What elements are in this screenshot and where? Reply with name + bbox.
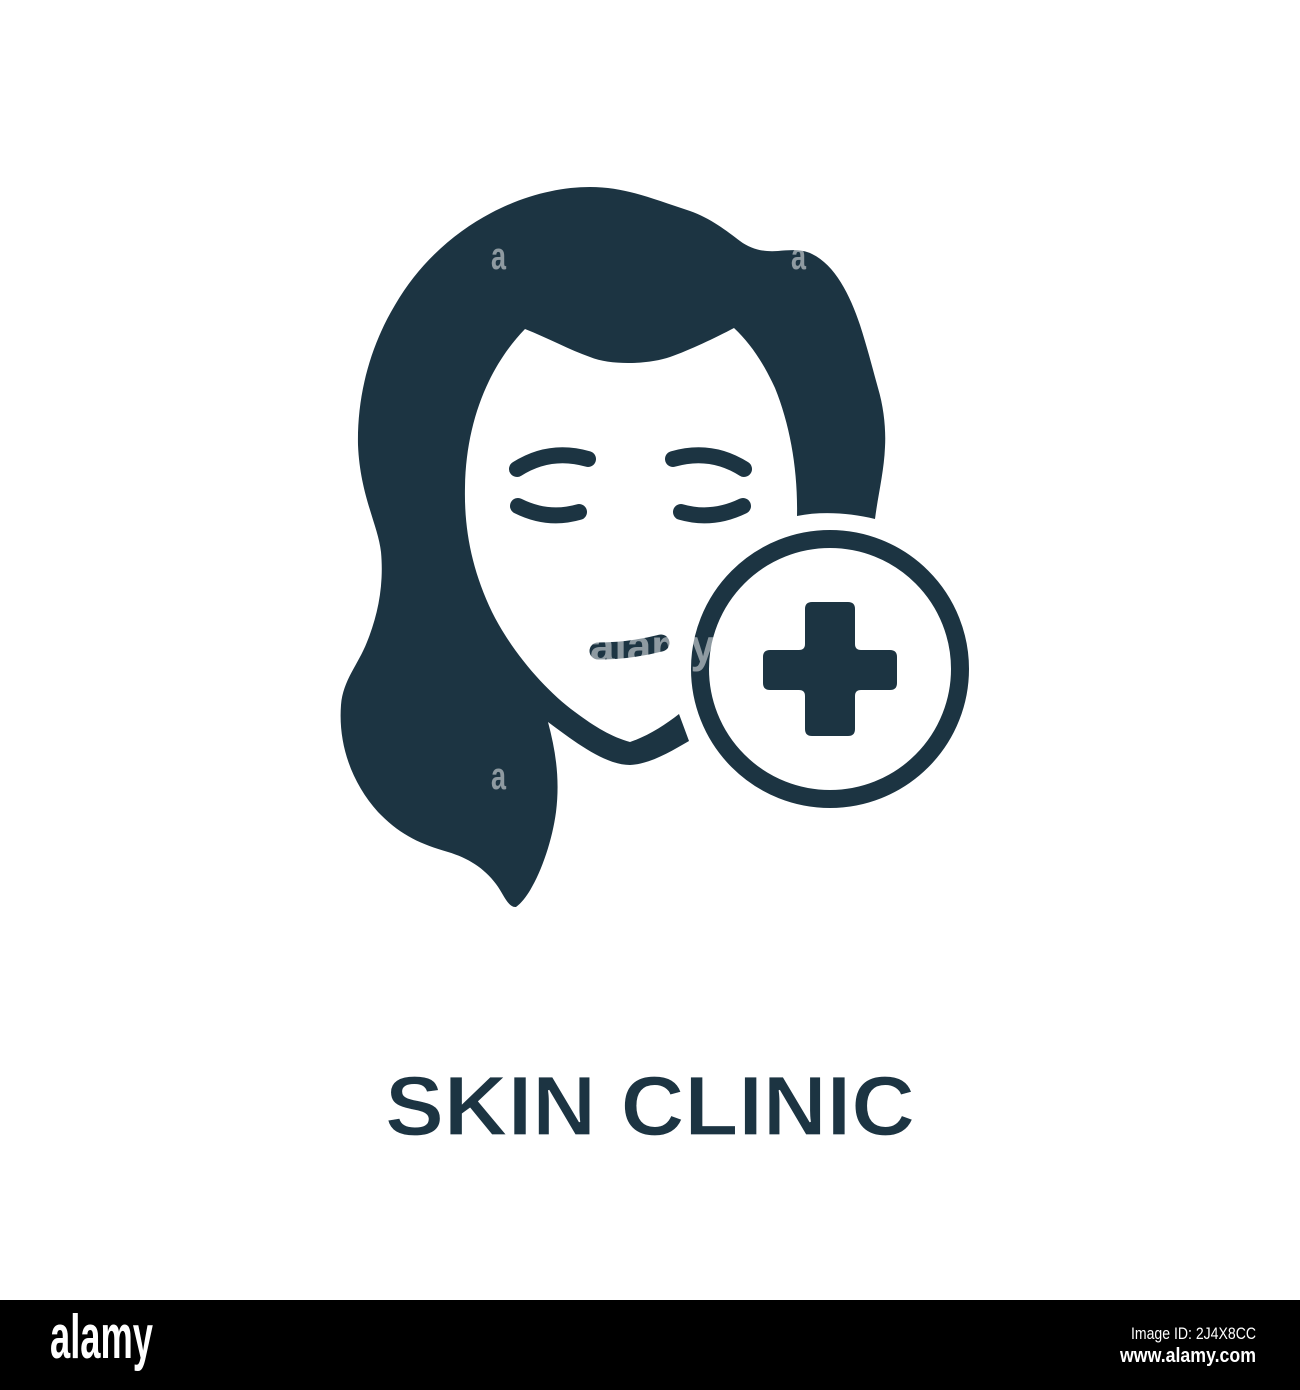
title: SKIN CLINIC: [385, 1059, 915, 1153]
icon: woman's face with medical cross: [341, 187, 960, 907]
footer bar: [0, 1300, 1300, 1390]
icon: hair and jaw outline: [341, 187, 885, 907]
footer logo: alamy: [50, 1303, 153, 1372]
watermark letters: a: [791, 236, 807, 278]
icon: medical cross: [763, 602, 897, 736]
icon: right eyelid: [681, 506, 743, 515]
watermark letters: alamy: [590, 620, 715, 672]
icon: left eyebrow: [517, 455, 588, 469]
icon: mouth: [598, 643, 661, 651]
icon: right eyebrow: [673, 455, 744, 469]
icon: circle badge: [700, 539, 960, 799]
watermark letters: [491, 236, 807, 798]
image id: Image ID: 2J4X8CC: [1131, 1324, 1256, 1343]
website: www.alamy.com: [1119, 1345, 1256, 1367]
icon: left eyelid: [518, 506, 579, 515]
watermark letters: a: [491, 236, 507, 278]
watermark letters: a: [491, 756, 507, 798]
